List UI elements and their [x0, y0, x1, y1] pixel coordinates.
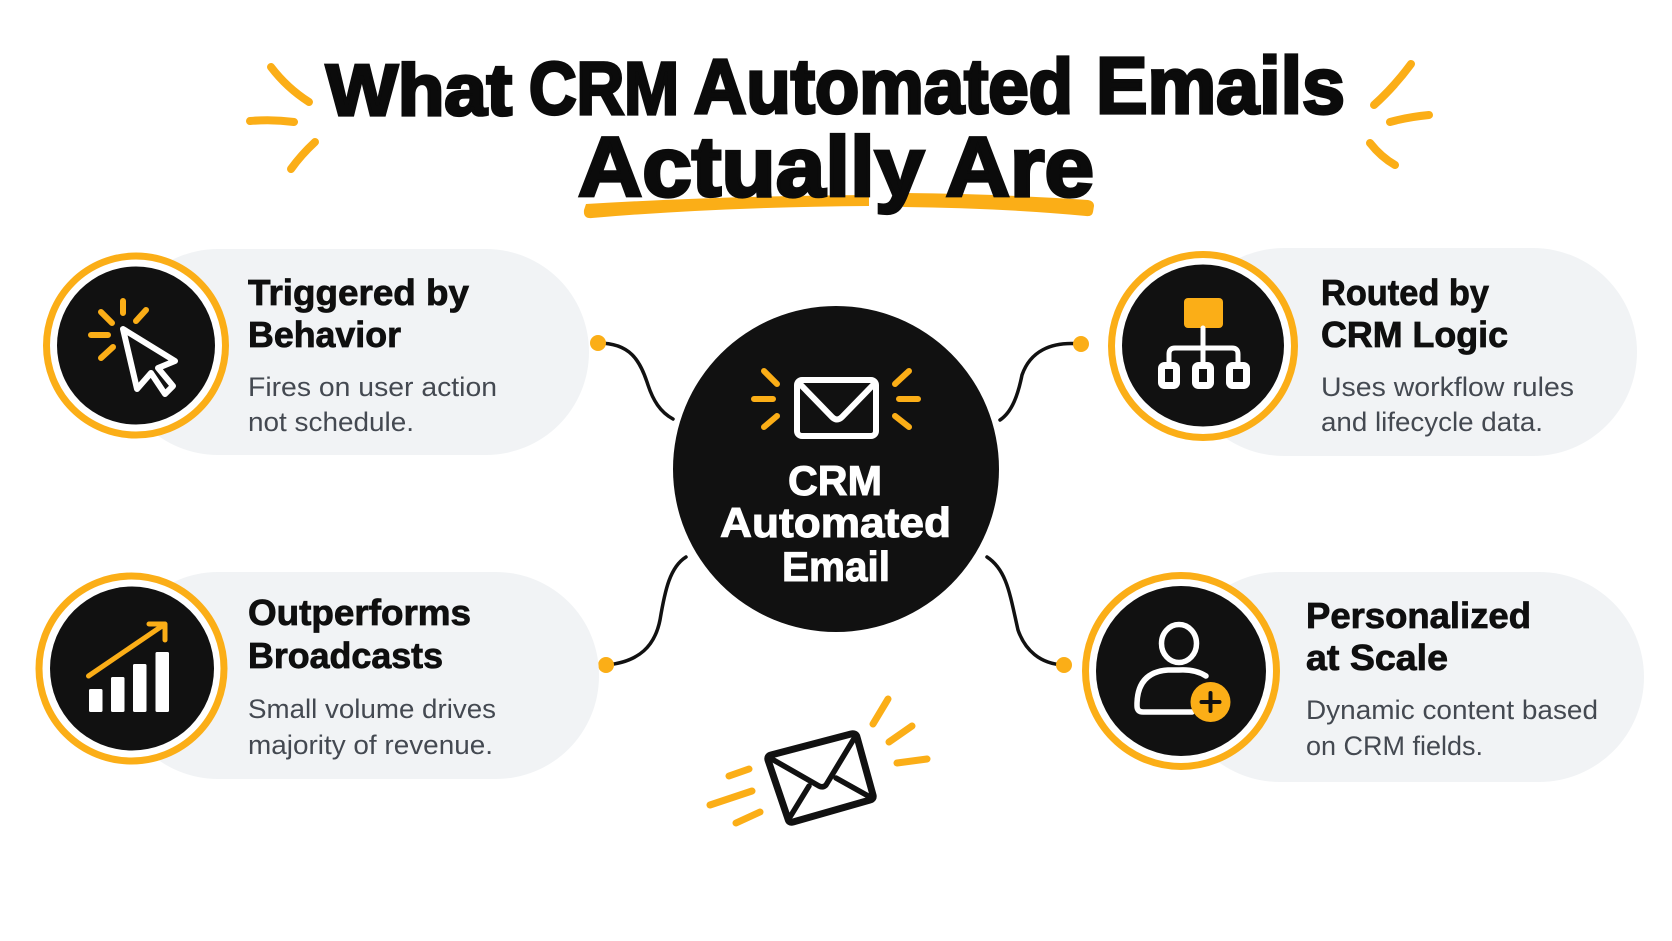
- description: Small volume drives: [248, 694, 496, 724]
- icon: cursor click: [46, 256, 226, 435]
- icon: growth chart: [39, 576, 224, 761]
- description: [248, 372, 497, 437]
- pill background: [1180, 248, 1637, 456]
- hub label: Automated: [720, 499, 951, 546]
- panel: personalized at scale: at Scale: [1306, 637, 1448, 678]
- heading: Personalized: [1306, 595, 1531, 636]
- description: [248, 694, 496, 760]
- icon: workflow tree: [1112, 254, 1294, 438]
- central hub: crm automated email: [673, 306, 999, 632]
- description: [1306, 695, 1598, 761]
- hub label: CRM: [788, 457, 882, 504]
- connector: behavior: [590, 335, 673, 419]
- right title sparks: [1370, 64, 1429, 165]
- description: [1321, 372, 1574, 437]
- panel: personalized at scale: [1086, 572, 1644, 782]
- title: Automated: [694, 44, 1073, 130]
- description: Uses workflow rules: [1321, 372, 1574, 402]
- title: What: [326, 51, 512, 131]
- panel: triggered by behavior: [46, 249, 589, 455]
- icon: flying envelope: [710, 699, 927, 823]
- connector: broadcasts: [598, 557, 686, 673]
- title: Actually Are: [578, 120, 1094, 214]
- description: on CRM fields.: [1306, 731, 1483, 761]
- description: Dynamic content based: [1306, 695, 1598, 725]
- left title sparks: [250, 67, 315, 169]
- heading: Triggered by: [248, 272, 469, 313]
- description: majority of revenue.: [248, 730, 493, 760]
- panel: triggered by behavior: Behavior: [248, 314, 401, 355]
- connector: personalized: [987, 557, 1072, 673]
- title: Emails: [1096, 41, 1345, 130]
- heading: Outperforms: [248, 592, 471, 633]
- title: CRM: [529, 47, 679, 130]
- hub label: [720, 457, 951, 590]
- connector: routing: [1000, 336, 1089, 420]
- panel: outperforms broadcasts: [39, 572, 599, 779]
- pill background: [115, 249, 589, 455]
- title underline: [584, 193, 1094, 218]
- panel: routed by crm logic: CRM Logic: [1321, 314, 1508, 355]
- description: Fires on user action: [248, 372, 497, 402]
- pill background: [1175, 572, 1644, 782]
- panel: outperforms broadcasts: Broadcasts: [248, 635, 443, 676]
- panel: routed by crm logic: [1112, 248, 1637, 456]
- title: [326, 41, 1345, 214]
- pill background: [115, 572, 599, 779]
- description: not schedule.: [248, 407, 414, 437]
- description: and lifecycle data.: [1321, 407, 1543, 437]
- hub label: Email: [782, 543, 890, 590]
- icon: user with plus badge: [1086, 576, 1276, 766]
- icon: envelope with rays: [754, 371, 918, 436]
- heading: Routed by: [1321, 272, 1489, 313]
